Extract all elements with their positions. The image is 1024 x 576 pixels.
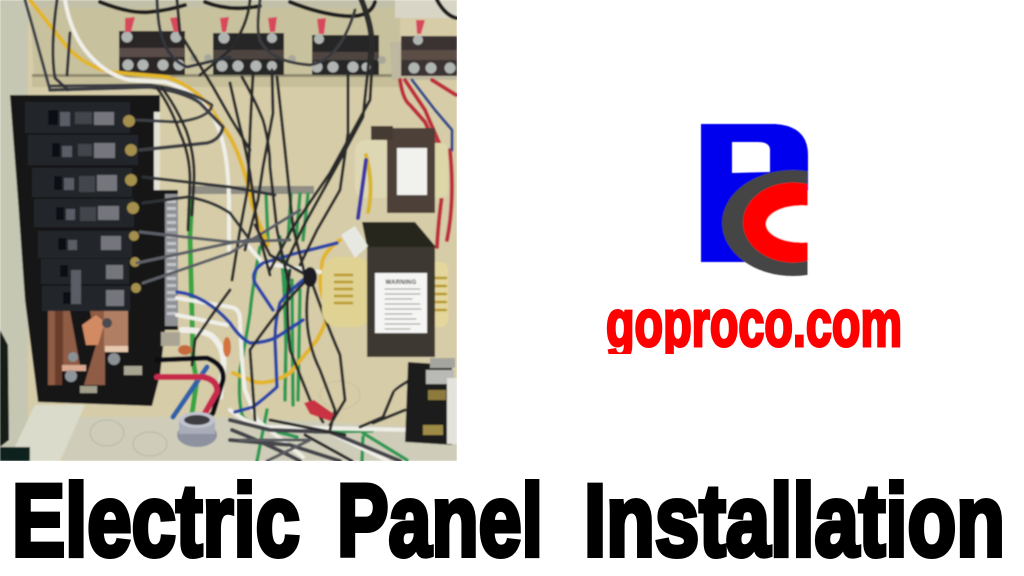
letter P	[701, 124, 808, 262]
relay	[405, 358, 457, 445]
breaker panel: black housing	[10, 95, 178, 406]
brand url: goproco.com	[606, 286, 902, 360]
orange nut	[178, 345, 192, 355]
black and grey wires	[25, 0, 410, 461]
ground bar	[190, 186, 314, 194]
red service wire	[157, 377, 217, 427]
letter c	[721, 169, 808, 277]
warning label text: WARNING	[385, 280, 417, 286]
terminal blocks	[119, 17, 457, 76]
transformer top	[355, 126, 448, 218]
top black twisted wires	[100, 0, 456, 18]
green wires	[190, 194, 407, 461]
red wires at transformer	[400, 80, 456, 247]
transformer bottom	[322, 222, 448, 357]
mounting rail	[30, 8, 400, 76]
neutral terminal bar	[165, 194, 178, 326]
conduit connector	[177, 412, 217, 447]
copper bus section	[48, 311, 142, 400]
blue wires	[173, 243, 337, 417]
title: Panel	[337, 464, 543, 576]
white wires	[65, 0, 417, 461]
red wire nut	[304, 400, 334, 421]
yellow wires	[30, 0, 340, 383]
wire tag	[341, 226, 368, 258]
white strip beside breakers	[154, 112, 160, 190]
cabinet back wall	[0, 0, 457, 461]
breakers	[25, 102, 138, 311]
title: Electric	[12, 464, 300, 576]
floor of the enclosure	[63, 417, 457, 461]
logo: PC	[700, 123, 809, 277]
title	[12, 464, 1005, 576]
photo: electric panel interior	[0, 0, 457, 461]
